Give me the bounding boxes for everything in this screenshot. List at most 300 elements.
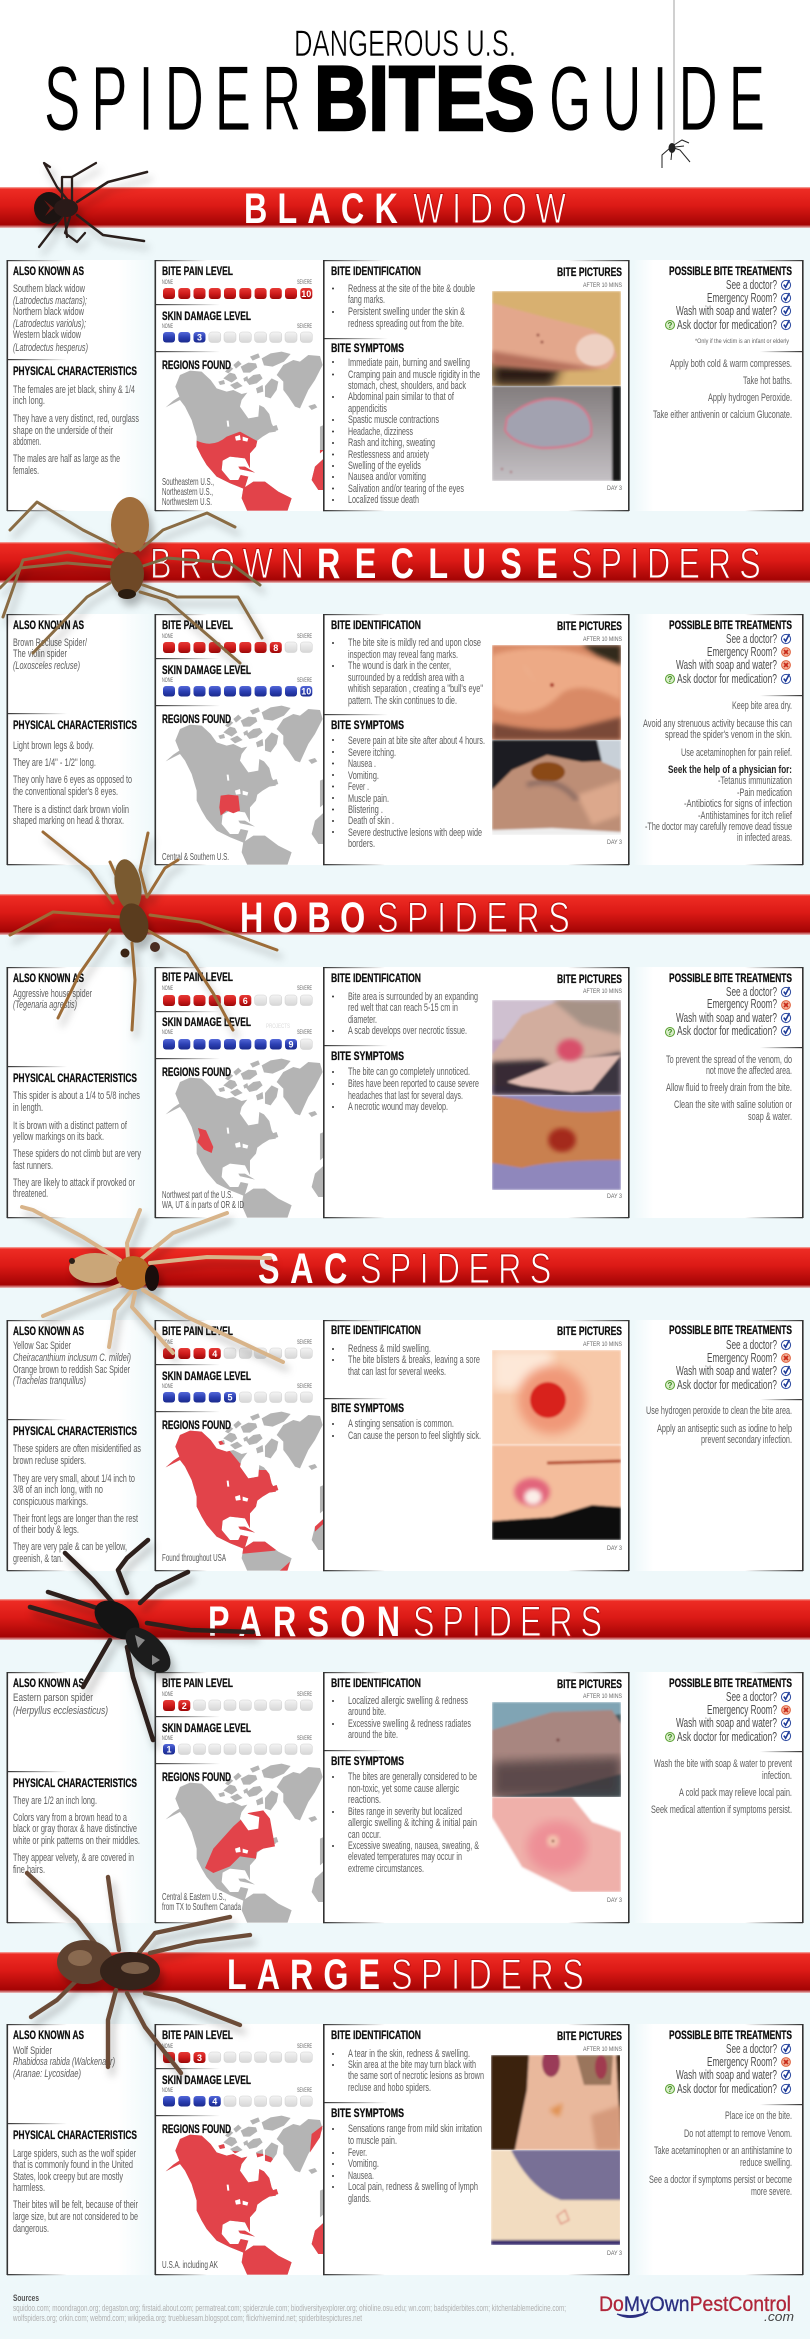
panel: also known as and physical characteristics: black or gray thorax & have distinctive xyxy=(13,1823,137,1835)
level: skin damage 1 xyxy=(162,1723,312,1754)
panel: also known as and physical characteristics: States, look creepy but are mostly xyxy=(13,2171,123,2183)
level: skin damage 4: NONE xyxy=(162,2088,173,2094)
photo: red round bite after 10 mins xyxy=(492,1350,621,1445)
panel: levels and regions: REGIONS FOUND xyxy=(162,1420,231,1432)
ribbon: large spiders xyxy=(0,1952,810,1999)
panel: levels and regions: REGIONS FOUND xyxy=(162,1772,231,1784)
photo: ankle bite on day 3 xyxy=(491,2150,621,2245)
panel: also known as and physical characteristics: PHYSICAL CHARACTERISTICS xyxy=(13,1426,137,1438)
panel: also known as and physical characteristics: Colors vary from a brown head to a xyxy=(13,1812,128,1824)
panel: bite identification, symptoms and pictures: BITE PICTURES xyxy=(557,974,622,986)
panel: bite identification, symptoms and pictures: Blistering . xyxy=(348,804,383,816)
map: regions found xyxy=(166,1764,324,1925)
panel: bite identification, symptoms and pictures xyxy=(323,1320,630,1571)
panel: also known as and physical characteristics: the conventional spider's 8 eyes. xyxy=(13,786,118,798)
panel: also known as and physical characteristics: Eastern parson spider xyxy=(13,1692,93,1704)
ribbon: black widow: BLACK xyxy=(244,186,398,233)
panel: bite identification, symptoms and pictures: BITE SYMPTOMS xyxy=(331,343,404,355)
level: skin damage 9 xyxy=(162,1017,312,1050)
level: skin damage 9: SKIN DAMAGE LEVEL xyxy=(162,1017,251,1029)
panel: also known as and physical characteristics: Their bites will be felt, because of their xyxy=(13,2199,138,2211)
panel: also known as and physical characteristics: shaped marking on head & thorax. xyxy=(13,815,124,827)
spider: large wolf spider xyxy=(27,1873,250,2073)
panel: also known as and physical characteristics: They appear velvety, & are covered in xyxy=(13,1852,134,1864)
panel: also known as and physical characteristics: 3/8 of an inch long, with no xyxy=(13,1484,103,1496)
panel: levels and regions: REGIONS FOUND xyxy=(162,360,231,372)
panel: bite identification, symptoms and pictures: Skin area at the bite may turn black with xyxy=(348,2059,476,2071)
photo: swollen skin after 10 mins xyxy=(492,645,621,740)
level: skin damage 1: 1 xyxy=(166,1744,172,1754)
panel: bite identification, symptoms and pictures: Fever . xyxy=(348,781,369,793)
panel: bite identification, symptoms and pictures: DAY 3 xyxy=(607,840,623,846)
panel: bite identification, symptoms and pictures: Local pain, redness & swelling of lymph xyxy=(348,2181,478,2193)
panel: bite identification, symptoms and pictures: around bite. xyxy=(348,1706,386,1718)
spider: brown recluse xyxy=(0,497,262,663)
panel: bite identification, symptoms and pictures: Severe destructive lesions with deep wide xyxy=(348,827,482,839)
panel: also known as and physical characteristics: fast runners. xyxy=(13,1160,53,1172)
panel: bite identification, symptoms and pictures: BITE IDENTIFICATION xyxy=(331,973,421,985)
panel: bite identification, symptoms and pictures: BITE SYMPTOMS xyxy=(331,1756,404,1768)
panel: also known as and physical characteristics: Western black widow xyxy=(13,329,81,341)
panel: bite identification, symptoms and pictures: glands. xyxy=(348,2193,371,2205)
panel: bite identification, symptoms and pictures: to muscle pain. xyxy=(348,2135,397,2147)
panel: bite identification, symptoms and pictures: BITE SYMPTOMS xyxy=(331,1403,404,1415)
panel: possible bite treatments: ? xyxy=(668,1028,673,1037)
panel: bite identification, symptoms and pictures: that can last for several weeks. xyxy=(348,1366,446,1378)
panel: bite identification, symptoms and pictures: appendicitis xyxy=(348,403,387,415)
panel: bite identification, symptoms and pictures: Redness at the site of the bite & double xyxy=(348,283,475,295)
photo: toes with bite after 10 mins xyxy=(491,2049,621,2150)
level: bite pain 6: BITE PAIN LEVEL xyxy=(162,972,233,984)
level: skin damage 9: PROJECTS xyxy=(266,1024,290,1030)
panel: bite identification, symptoms and pictures: Swelling of the eyelids xyxy=(348,460,421,472)
panel: bite identification, symptoms and pictures: Headache, dizziness xyxy=(348,426,413,438)
panel: levels and regions: REGIONS FOUND xyxy=(162,1067,231,1079)
level: skin damage 10: NONE xyxy=(162,678,173,684)
title: DANGEROUS U.S. xyxy=(294,23,516,64)
panel: bite identification, symptoms and pictures: BITE IDENTIFICATION xyxy=(331,1325,421,1337)
panel: also known as and physical characteristics: (Loxosceles recluse) xyxy=(13,660,80,672)
panel: also known as and physical characteristics: greenish, & tan. xyxy=(13,1553,63,1565)
panel: possible bite treatments xyxy=(633,614,804,865)
level: skin damage 3: NONE xyxy=(162,324,173,330)
section: sac spiders xyxy=(0,1246,810,1573)
panel: levels and regions xyxy=(154,1320,324,1573)
panel: levels and regions: REGIONS FOUND xyxy=(162,714,231,726)
level: bite pain 3: 3 xyxy=(197,2053,202,2063)
panel: bite identification, symptoms and pictures: surrounded by a reddish area with a xyxy=(348,672,465,684)
panel: bite identification, symptoms and pictures: The bite can go completely unnoticed. xyxy=(348,1066,470,1078)
level: skin damage 1: SEVERE xyxy=(297,1736,312,1742)
level: skin damage 5: 5 xyxy=(227,1392,233,1402)
panel: also known as and physical characteristics: PHYSICAL CHARACTERISTICS xyxy=(13,366,137,378)
panel: also known as and physical characteristics: These spiders do not climb but are very xyxy=(13,1148,141,1160)
level: bite pain 2 xyxy=(162,1678,312,1711)
panel: bite identification, symptoms and pictures: BITE IDENTIFICATION xyxy=(331,1678,421,1690)
panel: bite identification, symptoms and pictures: Vomiting. xyxy=(348,770,379,782)
panel: bite identification, symptoms and pictures: Cramping pain and muscle rigidity in the xyxy=(348,369,480,381)
panel: bite identification, symptoms and pictures: Sensations range from mild skin irritation xyxy=(348,2123,482,2135)
panel: possible bite treatments xyxy=(633,967,804,1218)
level: skin damage 4: 4 xyxy=(212,2096,217,2106)
panel: also known as and physical characteristics: threatened. xyxy=(13,1188,48,1200)
title xyxy=(44,23,765,151)
level: skin damage 9: SEVERE xyxy=(297,1030,312,1036)
panel: also known as and physical characteristics: (Tegenaria agrestis) xyxy=(13,999,77,1011)
panel: also known as and physical characteristics: that is commonly found in the United xyxy=(13,2159,133,2171)
panel: bite identification, symptoms and pictures: DAY 3 xyxy=(607,1194,623,1200)
sources: Sources xyxy=(13,2293,39,2304)
panel: bite identification, symptoms and pictures: Bites have been reported to cause severe xyxy=(348,1078,479,1090)
panel: bite identification, symptoms and pictures: BITE PICTURES xyxy=(557,267,622,279)
section: brown recluse xyxy=(0,541,810,867)
panel: bite identification, symptoms and pictures: The wound is dark in the center, xyxy=(348,660,451,672)
panel: possible bite treatments: infection. xyxy=(762,1770,792,1782)
level: skin damage 5: SEVERE xyxy=(297,1384,312,1390)
panel: levels and regions xyxy=(154,967,324,1220)
panel: also known as and physical characteristics: of their body & legs. xyxy=(13,1524,79,1536)
panel: levels and regions: Central & Southern U.S. xyxy=(162,851,229,863)
panel: bite identification, symptoms and pictures: BITE PICTURES xyxy=(557,1326,622,1338)
logo: DoMyOwnPestControl.com: .com xyxy=(764,2309,794,2324)
photo: hand with red welt after 10 mins xyxy=(492,1000,621,1095)
level: bite pain 6 xyxy=(162,972,312,1006)
panel: also known as and physical characteristics: The females are jet black, shiny & 1/4 xyxy=(13,384,135,396)
title: GUIDE xyxy=(549,48,765,151)
panel: also known as and physical characteristics: PHYSICAL CHARACTERISTICS xyxy=(13,1778,137,1790)
panel: bite identification, symptoms and pictures: can occur. xyxy=(348,1829,381,1841)
panel: also known as and physical characteristics: (Latrodectus mactans); xyxy=(13,295,87,307)
panel: also known as and physical characteristics: Their front legs are longer than the rest xyxy=(13,1513,138,1525)
panel: bite identification, symptoms and pictures: DAY 3 xyxy=(607,1898,623,1904)
panel: bite identification, symptoms and pictures: A tear in the skin, redness & swelling. xyxy=(348,2048,470,2060)
panel: levels and regions: U.S.A. including AK xyxy=(162,2259,218,2271)
panel: bite identification, symptoms and pictures: red welt that can reach 5-15 cm in xyxy=(348,1002,458,1014)
panel: bite identification, symptoms and pictures: The bite blisters & breaks, leaving a sore xyxy=(348,1354,480,1366)
panel: also known as and physical characteristics: Rhabidosa rabida (Walckenaer) xyxy=(13,2056,115,2068)
panel: bite identification, symptoms and pictures: headaches that last for several days. xyxy=(348,1090,463,1102)
panel: bite identification, symptoms and pictures: BITE IDENTIFICATION xyxy=(331,266,421,278)
panel: also known as and physical characteristics xyxy=(6,260,155,511)
panel: bite identification, symptoms and pictures: extreme circumstances. xyxy=(348,1863,424,1875)
ribbon: hobo spiders xyxy=(0,894,810,942)
panel: bite identification, symptoms and pictures: AFTER 10 MINS xyxy=(583,637,622,643)
panel: possible bite treatments xyxy=(633,2024,804,2275)
panel: also known as and physical characteristics: (Trachelas tranquillus) xyxy=(13,1375,86,1387)
level: skin damage 9: NONE xyxy=(162,1030,173,1036)
level: bite pain 3: NONE xyxy=(162,2044,173,2050)
photo: leg lesion on day 3 xyxy=(492,1095,621,1190)
panel: bite identification, symptoms and pictures: The bites are generally considered to be xyxy=(348,1771,477,1783)
ribbon: brown recluse xyxy=(0,541,810,588)
panel: also known as and physical characteristics: (Latrodectus variolus); xyxy=(13,318,86,330)
panel: bite identification, symptoms and pictures: elevated temperatures may occur in xyxy=(348,1851,462,1863)
panel: bite identification, symptoms and pictures: Rash and itching, sweating xyxy=(348,437,435,449)
panel: levels and regions: WA, UT & in parts of OR & ID xyxy=(162,1199,244,1211)
level: bite pain 3: BITE PAIN LEVEL xyxy=(162,2030,233,2042)
level: skin damage 3: SEVERE xyxy=(297,324,312,330)
panel: possible bite treatments: See a doctor? xyxy=(726,632,777,646)
panel: bite identification, symptoms and pictures: AFTER 10 MINS xyxy=(583,1342,622,1348)
panel: bite identification, symptoms and pictures: DAY 3 xyxy=(607,1546,623,1552)
panel: also known as and physical characteristics: These spiders are often misidentified as xyxy=(13,1443,141,1455)
panel: levels and regions: REGIONS FOUND xyxy=(162,2124,231,2136)
panel: bite identification, symptoms and pictures: Immediate pain, burning and swelling xyxy=(348,357,470,369)
panel: bite identification, symptoms and pictures: Salivation and/or tearing of the eyes xyxy=(348,483,464,495)
ribbon: sac spiders xyxy=(0,1246,810,1293)
panel: also known as and physical characteristics: Aggressive house spider xyxy=(13,988,92,1000)
level: skin damage 9: 9 xyxy=(288,1040,294,1050)
panel: bite identification, symptoms and pictures: BITE SYMPTOMS xyxy=(331,1051,404,1063)
panel: bite identification, symptoms and pictures: Can cause the person to feel slightly sick. xyxy=(348,1430,481,1442)
panel: also known as and physical characteristics: inch long. xyxy=(13,395,45,407)
level: bite pain 6: 6 xyxy=(243,996,248,1006)
panel: bite identification, symptoms and pictures: Bites range in severity but localized xyxy=(348,1806,462,1818)
panel: also known as and physical characteristics: conspicuous markings. xyxy=(13,1496,88,1508)
photo: blistered sore on day 3 xyxy=(492,1445,621,1540)
level: bite pain 4 xyxy=(162,1326,312,1359)
panel: bite identification, symptoms and pictures xyxy=(323,614,630,865)
level: skin damage 10 xyxy=(162,665,312,696)
ribbon: hobo spiders: SPIDERS xyxy=(377,895,570,942)
panel: bite identification, symptoms and pictures: BITE SYMPTOMS xyxy=(331,2108,404,2120)
panel: bite identification, symptoms and pictures: pattern. The skin continues to die. xyxy=(348,695,457,707)
panel: also known as and physical characteristics xyxy=(6,1320,155,1571)
panel: levels and regions xyxy=(154,2024,324,2277)
panel: also known as and physical characteristics: ALSO KNOWN AS xyxy=(13,620,84,632)
level: bite pain 10 xyxy=(162,266,312,299)
photo: dark necrotic wound on day 3 xyxy=(492,740,621,835)
panel: possible bite treatments: See a doctor? xyxy=(726,1338,777,1352)
level: bite pain 3 xyxy=(162,2030,312,2063)
spider: sac xyxy=(22,1207,283,1362)
panel: bite identification, symptoms and pictures: stomach, chest, shoulders, and back xyxy=(348,380,466,392)
panel: possible bite treatments: ? xyxy=(668,1733,673,1742)
panel: also known as and physical characteristics: brown recluse spiders. xyxy=(13,1455,86,1467)
level: bite pain 8 xyxy=(162,620,312,653)
panel: bite identification, symptoms and pictures: DAY 3 xyxy=(607,2251,623,2257)
panel: bite identification, symptoms and pictures: fang marks. xyxy=(348,294,385,306)
panel: also known as and physical characteristics: They have a very distinct, red, ourglass xyxy=(13,413,139,425)
level: bite pain 4: SEVERE xyxy=(297,1340,312,1346)
panel: also known as and physical characteristics: It is brown with a distinct pattern of xyxy=(13,1120,128,1132)
panel: bite identification, symptoms and pictures: A scab develops over necrotic tissue. xyxy=(348,1025,467,1037)
level: bite pain 8: NONE xyxy=(162,634,173,640)
level: skin damage 3: 3 xyxy=(197,332,202,342)
title: BITES xyxy=(314,48,535,150)
level: skin damage 5 xyxy=(162,1371,312,1402)
panel: bite identification, symptoms and pictures: inspection may reveal fang marks. xyxy=(348,649,458,661)
panel: bite identification, symptoms and pictures: The bite site is mildly red and upon close xyxy=(348,637,481,649)
level: skin damage 4 xyxy=(162,2075,312,2106)
panel: bite identification, symptoms and pictures: the same sort of necrotic lesions as brown xyxy=(348,2070,484,2082)
panel: also known as and physical characteristics: Orange brown to reddish Sac Spider xyxy=(13,1364,130,1376)
level: skin damage 10: 10 xyxy=(301,686,311,696)
panel: also known as and physical characteristics: harmless. xyxy=(13,2182,45,2194)
panel: also known as and physical characteristics: Wolf Spider xyxy=(13,2045,52,2057)
panel: also known as and physical characteristics: The males are half as large as the xyxy=(13,453,120,465)
panel: possible bite treatments: ? xyxy=(668,321,673,330)
panel: levels and regions: Southeastern U.S., xyxy=(162,476,214,488)
panel: bite identification, symptoms and pictures: reactions. xyxy=(348,1794,381,1806)
panel: bite identification, symptoms and pictures: AFTER 10 MINS xyxy=(583,989,622,995)
panel: also known as and physical characteristics: ALSO KNOWN AS xyxy=(13,973,84,985)
panel: possible bite treatments: See a doctor? xyxy=(726,985,777,999)
panel: also known as and physical characteristics: PHYSICAL CHARACTERISTICS xyxy=(13,720,137,732)
level: skin damage 5: SKIN DAMAGE LEVEL xyxy=(162,1371,251,1383)
panel: bite identification, symptoms and pictures: Localized tissue death xyxy=(348,494,419,506)
panel: bite identification, symptoms and pictures: Excessive sweating, nausea, sweating, & xyxy=(348,1840,479,1852)
panel: also known as and physical characteristics: females. xyxy=(13,465,39,477)
panel: bite identification, symptoms and pictures xyxy=(323,967,630,1218)
level: skin damage 3 xyxy=(162,311,312,342)
panel: also known as and physical characteristics: PHYSICAL CHARACTERISTICS xyxy=(13,2130,137,2142)
panel: bite identification, symptoms and pictures: whitish separation , creating a "bull's eye" xyxy=(347,683,483,695)
level: bite pain 10: BITE PAIN LEVEL xyxy=(162,266,233,278)
panel: bite identification, symptoms and pictures: Redness & mild swelling. xyxy=(348,1343,431,1355)
panel: bite identification, symptoms and pictures: BITE PICTURES xyxy=(557,621,622,633)
panel: bite identification, symptoms and pictures: DAY 3 xyxy=(607,486,623,492)
panel: bite identification, symptoms and pictures xyxy=(323,1672,630,1923)
panel: bite identification, symptoms and pictures: Fever. xyxy=(348,2147,367,2159)
panel: bite identification, symptoms and pictures: Severe itching. xyxy=(348,747,396,759)
panel: bite identification, symptoms and pictures: Nausea and/or vomiting xyxy=(348,471,426,483)
panel: bite identification, symptoms and pictures: Spastic muscle contractions xyxy=(348,414,439,426)
ribbon: sac spiders: SPIDERS xyxy=(360,1246,551,1293)
level: skin damage 10: SEVERE xyxy=(297,678,312,684)
level: bite pain 10: 10 xyxy=(301,289,311,299)
panel: also known as and physical characteristics: Light brown legs & body. xyxy=(13,740,94,752)
panel: bite identification, symptoms and pictures: around the bite. xyxy=(348,1729,398,1741)
level: skin damage 10: SKIN DAMAGE LEVEL xyxy=(162,665,251,677)
panel: also known as and physical characteristics: shape on the underside of their xyxy=(13,425,113,437)
ribbon: parson spiders: PARSON xyxy=(208,1599,400,1646)
panel: bite identification, symptoms and pictures: BITE PICTURES xyxy=(557,2031,622,2043)
panel: also known as and physical characteristics: ALSO KNOWN AS xyxy=(13,1326,84,1338)
title: SPIDER xyxy=(44,48,301,151)
panel: also known as and physical characteristics: ALSO KNOWN AS xyxy=(13,1678,84,1690)
panel: bite identification, symptoms and pictures: Abdominal pain similar to that of xyxy=(348,391,455,403)
level: bite pain 4: BITE PAIN LEVEL xyxy=(162,1326,233,1338)
panel: also known as and physical characteristics: (Herpyllus ecclesiasticus) xyxy=(13,1705,108,1717)
level: bite pain 2: NONE xyxy=(162,1692,173,1698)
panel: also known as and physical characteristics: Northern black widow xyxy=(13,306,84,318)
panel: bite identification, symptoms and pictures: Severe pain at bite site after about 4 hours. xyxy=(348,735,485,747)
panel: possible bite treatments: See a doctor? xyxy=(726,2042,777,2056)
level: skin damage 1: NONE xyxy=(162,1736,173,1742)
panel: also known as and physical characteristics: They are likely to attack if provoked or xyxy=(13,1177,135,1189)
section: large spiders xyxy=(0,1952,810,2277)
panel: bite identification, symptoms and pictures: BITE IDENTIFICATION xyxy=(331,620,421,632)
panel: possible bite treatments xyxy=(633,1672,804,1923)
section: hobo spiders xyxy=(0,894,810,1220)
panel: levels and regions: Found throughout USA xyxy=(162,1552,226,1564)
panel: levels and regions xyxy=(154,1672,324,1925)
ribbon: parson spiders: SPIDERS xyxy=(413,1599,602,1646)
panel: also known as and physical characteristics: ALSO KNOWN AS xyxy=(13,2030,84,2042)
panel: also known as and physical characteristics: large size, but are not considered to be xyxy=(13,2211,138,2223)
panel: bite identification, symptoms and pictures: BITE IDENTIFICATION xyxy=(331,2030,421,2042)
panel: also known as and physical characteristics: PHYSICAL CHARACTERISTICS xyxy=(13,1073,137,1085)
panel: also known as and physical characteristics: fine hairs. xyxy=(13,1864,45,1876)
ribbon: parson spiders xyxy=(0,1599,810,1646)
ribbon: brown recluse: SPIDERS xyxy=(571,541,761,588)
level: bite pain 8: BITE PAIN LEVEL xyxy=(162,620,233,632)
panel: bite identification, symptoms and pictures: non-toxic, yet some cause allergic xyxy=(348,1783,459,1795)
map: regions found xyxy=(166,706,324,867)
panel: also known as and physical characteristics: This spider is about a 1/4 to 5/8 inches xyxy=(13,1090,140,1102)
level: skin damage 4: SKIN DAMAGE LEVEL xyxy=(162,2075,251,2087)
map: regions found xyxy=(166,352,324,513)
panel: possible bite treatments: See a doctor? xyxy=(726,278,777,292)
panel: bite identification, symptoms and pictures: Excessive swelling & redness radiates xyxy=(348,1718,471,1730)
panel: bite identification, symptoms and pictures: Persistent swelling under the skin & xyxy=(348,306,465,318)
ribbon: large spiders: LARGE xyxy=(227,1952,380,1999)
panel: also known as and physical characteristics: They are 1/2 an inch long. xyxy=(13,1795,97,1807)
panel: bite identification, symptoms and pictures: AFTER 10 MINS xyxy=(583,1694,622,1700)
spider: hobo xyxy=(10,832,277,1030)
panel: possible bite treatments: ? xyxy=(668,1381,673,1390)
level: skin damage 4: SEVERE xyxy=(297,2088,312,2094)
panel: also known as and physical characteristics: Southern black widow xyxy=(13,283,85,295)
panel: also known as and physical characteristics: Cheiracanthium inclusum C. mildei) xyxy=(13,1352,131,1364)
panel: bite identification, symptoms and pictures: allergic swelling & itching & initial pain xyxy=(348,1817,477,1829)
panel: bite identification, symptoms and pictures: redness spreading out from the bite. xyxy=(348,318,464,330)
panel: also known as and physical characteristics: Yellow Sac Spider xyxy=(13,1340,71,1352)
panel: also known as and physical characteristics: white or pink patterns on their middles. xyxy=(12,1835,140,1847)
panel: also known as and physical characteristics xyxy=(6,967,155,1218)
section: black widow xyxy=(0,186,810,513)
panel: possible bite treatments xyxy=(633,260,804,511)
panel: also known as and physical characteristics: Large spiders, such as the wolf spider xyxy=(13,2148,136,2160)
sources xyxy=(12,2293,566,2324)
panel: bite identification, symptoms and pictures: AFTER 10 MINS xyxy=(583,2047,622,2053)
panel: also known as and physical characteristics: They are very small, about 1/4 inch to xyxy=(13,1473,135,1485)
panel: also known as and physical characteristics: Brown Recluse Spider/ xyxy=(13,637,88,649)
level: bite pain 8: SEVERE xyxy=(297,634,312,640)
level: bite pain 8: 8 xyxy=(273,643,278,653)
panel: bite identification, symptoms and pictures: recluse and hobo spiders. xyxy=(348,2082,431,2094)
map: regions found xyxy=(166,1412,324,1573)
level: skin damage 3: SKIN DAMAGE LEVEL xyxy=(162,311,251,323)
panel: also known as and physical characteristics: in length. xyxy=(13,1102,43,1114)
panel: bite identification, symptoms and pictures: Localized allergic swelling & redness xyxy=(348,1695,468,1707)
panel: possible bite treatments: See a doctor? xyxy=(726,1690,777,1704)
panel: levels and regions: Northwestern U.S. xyxy=(162,496,212,508)
level: skin damage 5: NONE xyxy=(162,1384,173,1390)
panel: levels and regions: Central & Eastern U.S., xyxy=(162,1891,226,1903)
panel: possible bite treatments: ? xyxy=(668,2085,673,2094)
panel: also known as and physical characteristics: abdomen. xyxy=(13,436,41,448)
panel: also known as and physical characteristics: ALSO KNOWN AS xyxy=(13,266,84,278)
map: regions found xyxy=(166,1059,324,1220)
panel: also known as and physical characteristics: They are 1/4" - 1/2" long. xyxy=(13,757,96,769)
ribbon: large spiders: SPIDERS xyxy=(391,1952,584,1999)
panel: possible bite treatments: *Only if the victim is an infant or elderly xyxy=(695,339,789,345)
panel: levels and regions: Northwest part of the U.S. xyxy=(162,1189,233,1201)
panel: bite identification, symptoms and pictures: BITE PICTURES xyxy=(557,1679,622,1691)
panel: bite identification, symptoms and pictures: Muscle pain. xyxy=(348,793,389,805)
level: bite pain 2: 2 xyxy=(182,1701,187,1711)
panel: also known as and physical characteristics xyxy=(6,2024,155,2275)
panel: also known as and physical characteristics xyxy=(6,614,155,865)
panel: bite identification, symptoms and pictures: A stinging sensation is common. xyxy=(348,1418,454,1430)
photo: finger bite after 10 mins xyxy=(492,291,621,386)
icon: small hanging spider on thread xyxy=(662,0,690,168)
panel: bite identification, symptoms and pictures xyxy=(323,2024,630,2275)
panel: bite identification, symptoms and pictures: Nausea . xyxy=(348,758,376,770)
map: regions found xyxy=(166,2116,324,2277)
